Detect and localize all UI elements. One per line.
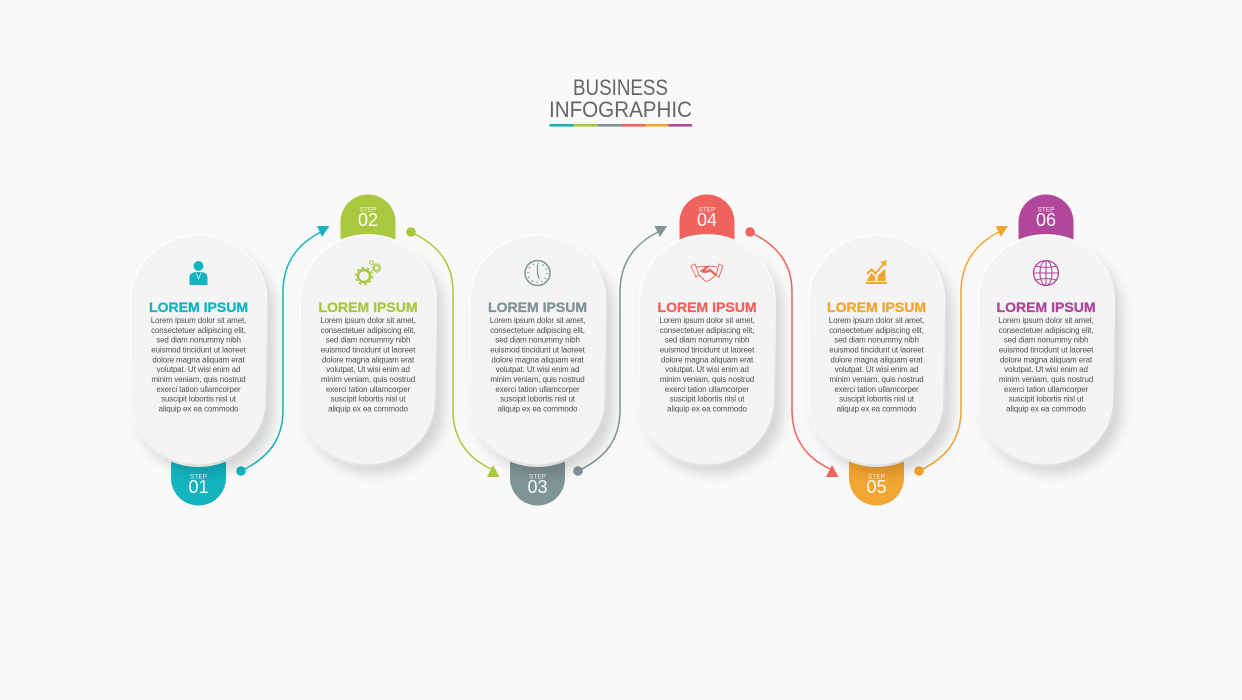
tab: step 02: STEP xyxy=(360,206,376,214)
body text: suscipit lobortis nisl ut xyxy=(1009,395,1084,404)
tab: step 04: STEP xyxy=(699,206,715,214)
body text: dolore magna aliquam erat xyxy=(830,355,923,364)
body text: minim veniam, quis nostrud xyxy=(660,375,754,384)
body text: minim veniam, quis nostrud xyxy=(321,375,415,384)
body text: suscipit lobortis nisl ut xyxy=(331,395,406,404)
icon: clock xyxy=(525,260,550,286)
title: BUSINESS xyxy=(573,75,668,100)
body text: minim veniam, quis nostrud xyxy=(151,375,246,384)
body text: consectetuer adipiscing elit, xyxy=(660,326,754,335)
panel: step 05 xyxy=(808,234,952,505)
heading: LOREM IPSUM xyxy=(827,299,926,315)
heading: LOREM IPSUM xyxy=(997,299,1095,315)
arrow: step 3 to step 4 xyxy=(573,226,667,476)
icon: globe xyxy=(1034,260,1058,286)
body text: Lorem ipsum dolor sit amet, xyxy=(490,316,585,325)
arrow: step 2 to step 3 xyxy=(406,227,500,477)
card shape xyxy=(299,234,444,474)
tab: step 01 xyxy=(171,450,226,505)
body text: dolore magna aliquam erat xyxy=(661,355,754,364)
body text: Lorem ipsum dolor sit amet, xyxy=(320,316,416,325)
card shape xyxy=(638,234,783,474)
body text: volutpat. Ut wisi enim ad xyxy=(665,365,749,374)
body text: dolore magna aliquam erat xyxy=(152,355,245,364)
body text: exerci tation ullamcorper xyxy=(1004,385,1089,394)
tab: step 06: STEP xyxy=(1038,206,1054,214)
card shape xyxy=(468,234,614,474)
card shape xyxy=(130,234,274,474)
body text: suscipit lobortis nisl ut xyxy=(839,395,915,404)
body text: suscipit lobortis nisl ut xyxy=(500,395,576,404)
body text: minim veniam, quis nostrud xyxy=(490,375,585,384)
body text: suscipit lobortis nisl ut xyxy=(670,395,745,404)
panel: step 06 xyxy=(977,195,1122,474)
body text: consectetuer adipiscing elit, xyxy=(999,326,1093,335)
title: INFOGRAPHIC xyxy=(549,97,692,122)
body text: aliquip ex ea commodo xyxy=(328,404,409,413)
body text: suscipit lobortis nisl ut xyxy=(161,395,237,404)
body text xyxy=(151,316,247,413)
tab: step 01: 01 xyxy=(188,477,209,497)
body text: volutpat. Ut wisi enim ad xyxy=(326,365,410,374)
body text: Lorem ipsum dolor sit amet, xyxy=(829,316,924,325)
icon: gears xyxy=(356,261,381,284)
body text: euismod tincidunt ut laoreet xyxy=(321,346,416,354)
body text: aliquip ex ea commodo xyxy=(837,404,917,413)
icon: person xyxy=(190,261,208,285)
tab: step 03: 03 xyxy=(527,477,548,497)
heading: LOREM IPSUM xyxy=(149,299,248,315)
body text: sed diam nonummy nibh xyxy=(834,336,919,345)
body text: consectetuer adipiscing elit, xyxy=(151,326,246,335)
body text: exerci tation ullamcorper xyxy=(665,385,750,394)
body text: consectetuer adipiscing elit, xyxy=(829,326,924,335)
body text: aliquip ex ea commodo xyxy=(667,404,748,413)
arrow: step 1 to step 2 xyxy=(236,226,330,476)
tab: step 02: 02 xyxy=(358,210,378,230)
heading: LOREM IPSUM xyxy=(319,299,417,315)
body text: exerci tation ullamcorper xyxy=(834,385,919,394)
body text: dolore magna aliquam erat xyxy=(1000,355,1093,364)
body text: sed diam nonummy nibh xyxy=(1004,336,1088,345)
body text xyxy=(490,316,586,413)
tab: step 01: STEP xyxy=(190,474,207,480)
panel: step 02 xyxy=(299,195,444,474)
body text: dolore magna aliquam erat xyxy=(491,355,584,364)
tab: step 05 xyxy=(849,450,904,505)
body text xyxy=(659,316,755,413)
body text: Lorem ipsum dolor sit amet, xyxy=(151,316,246,325)
body text: sed diam nonummy nibh xyxy=(495,336,580,345)
tab: step 03: STEP xyxy=(529,474,546,480)
body text: volutpat. Ut wisi enim ad xyxy=(835,365,918,374)
tab: step 04: 04 xyxy=(697,210,717,230)
tab: step 02 xyxy=(340,195,396,245)
body text: volutpat. Ut wisi enim ad xyxy=(496,365,579,374)
body text: euismod tincidunt ut laoreet xyxy=(829,346,925,354)
body text: sed diam nonummy nibh xyxy=(326,336,410,345)
panel: step 03 xyxy=(468,234,614,505)
card shape xyxy=(977,234,1122,474)
body text: euismod tincidunt ut laoreet xyxy=(999,346,1094,354)
body text: exerci tation ullamcorper xyxy=(156,385,241,394)
tab: step 06 xyxy=(1018,195,1074,245)
tab: step 06: 06 xyxy=(1036,210,1056,230)
tab: step 03 xyxy=(510,450,565,505)
body text: exerci tation ullamcorper xyxy=(495,385,580,394)
tab: step 05: 05 xyxy=(866,477,887,497)
body text: consectetuer adipiscing elit, xyxy=(490,326,585,335)
body text: volutpat. Ut wisi enim ad xyxy=(157,365,240,374)
body text: consectetuer adipiscing elit, xyxy=(321,326,415,335)
icon: growth chart xyxy=(866,260,887,284)
tab: step 04 xyxy=(680,195,734,245)
body text: volutpat. Ut wisi enim ad xyxy=(1004,365,1088,374)
panel: step 04 xyxy=(638,195,783,474)
title underline: six colours xyxy=(550,124,692,127)
arrow: step 5 to step 6 xyxy=(914,226,1008,476)
body text: sed diam nonummy nibh xyxy=(665,336,749,345)
icon: handshake xyxy=(691,264,723,281)
heading: LOREM IPSUM xyxy=(658,299,756,315)
body text: euismod tincidunt ut laoreet xyxy=(660,346,755,354)
panel: step 01 xyxy=(130,234,274,505)
body text: aliquip ex ea commodo xyxy=(498,404,578,413)
body text: minim veniam, quis nostrud xyxy=(829,375,924,384)
body text: euismod tincidunt ut laoreet xyxy=(151,346,247,354)
body text: Lorem ipsum dolor sit amet, xyxy=(998,316,1094,325)
body text xyxy=(829,316,925,413)
body text: Lorem ipsum dolor sit amet, xyxy=(659,316,755,325)
body text xyxy=(998,316,1094,413)
card shape xyxy=(808,234,952,474)
body text: euismod tincidunt ut laoreet xyxy=(490,346,586,354)
body text: dolore magna aliquam erat xyxy=(322,355,415,364)
body text: sed diam nonummy nibh xyxy=(156,336,241,345)
tab: step 05: STEP xyxy=(868,474,885,480)
heading: LOREM IPSUM xyxy=(488,299,587,315)
body text: aliquip ex ea commodo xyxy=(1006,404,1087,413)
body text: aliquip ex ea commodo xyxy=(159,404,239,413)
body text: exerci tation ullamcorper xyxy=(326,385,411,394)
body text xyxy=(320,316,416,413)
body text: minim veniam, quis nostrud xyxy=(999,375,1093,384)
arrow: step 4 to step 5 xyxy=(745,227,838,477)
title xyxy=(549,75,692,122)
